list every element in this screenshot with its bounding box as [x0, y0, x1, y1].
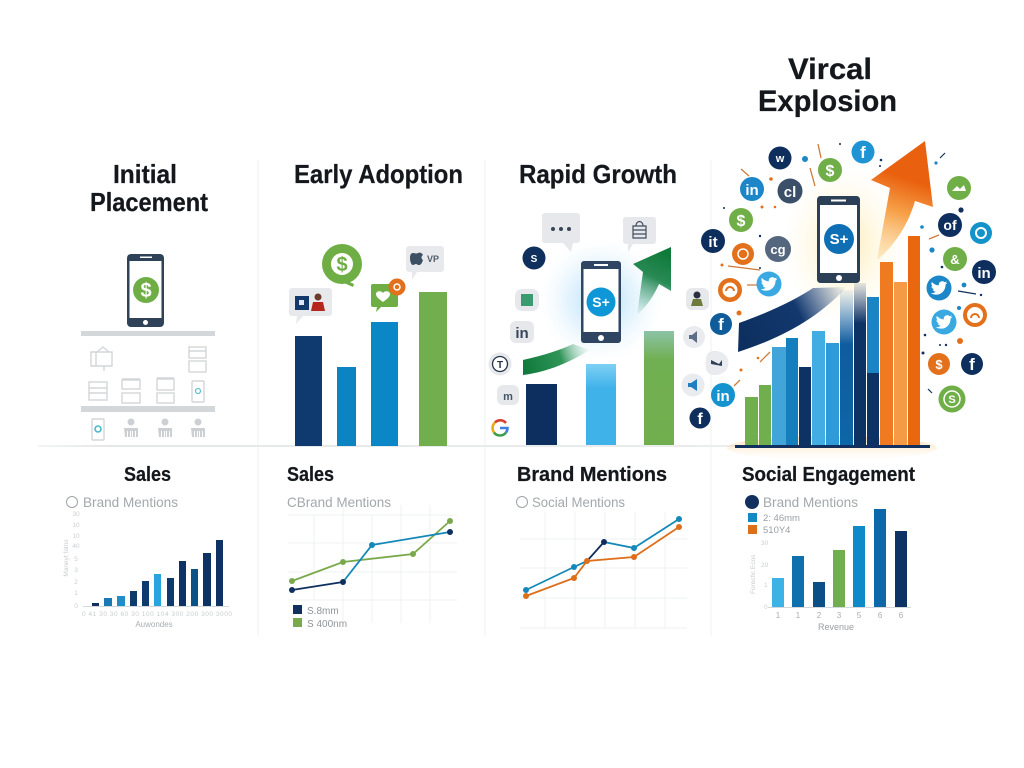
- title: Vircal Explosion: [758, 53, 897, 118]
- grid: [520, 512, 687, 628]
- icon: shopping bag bubble: [623, 217, 656, 252]
- panel: viral explosion: [701, 53, 996, 460]
- legend: Brand Mentions and series: 2: 46mm: [763, 513, 800, 524]
- icon: phone with logo: [817, 196, 860, 283]
- legend: series: S.8mm: [307, 606, 339, 617]
- icons: social badges left of phone: cl: [784, 184, 796, 201]
- chart panel: sales bars: [63, 464, 232, 629]
- icon: phone with dollar: [127, 254, 164, 327]
- legend: series: [293, 605, 347, 630]
- grey product icons: [89, 347, 206, 403]
- x axis labels: 2: [817, 611, 822, 620]
- y axis labels: Maneyt fatns: [63, 539, 70, 577]
- icon: phone with logo: S+: [830, 231, 849, 248]
- column dividers and baseline: [38, 160, 738, 636]
- icons: social badges left of phone: in: [745, 182, 759, 199]
- title: Early Adoption: Early Adoption: [294, 159, 463, 189]
- title: Initial Placement: Placement: [90, 187, 208, 217]
- arrow: green swoosh: [523, 344, 590, 375]
- bar chart: viral bars: [735, 236, 930, 448]
- icons: right social cluster: [682, 288, 724, 428]
- icon: grey bubble with brand: VP: [427, 254, 439, 264]
- icons: social badges top of phone: [818, 140, 874, 182]
- y axis labels: 10: [72, 533, 80, 540]
- legend: Brand Mentions and series: [745, 494, 858, 536]
- x axis labels: 6: [878, 611, 883, 620]
- icons: social badges right of chart: f: [969, 355, 975, 374]
- icon: heart bubble with badge: [371, 278, 406, 312]
- icons: left social cluster: S: [531, 254, 538, 265]
- icons: social badges top of phone: $: [826, 163, 835, 180]
- orange glow under chart: [727, 436, 937, 460]
- arrow: navy swoosh: [738, 287, 847, 352]
- heading: Sales: Sales: [287, 464, 334, 486]
- panel: rapid growth: [488, 159, 724, 445]
- icons: social badges top of phone: f: [860, 143, 866, 162]
- title: Initial Placement: Initial: [113, 159, 177, 189]
- x axis title: Revenue: [818, 622, 854, 632]
- icons: left social cluster: [488, 246, 546, 405]
- title: Initial Placement: [90, 159, 208, 217]
- icon: phone with logo: S+: [592, 294, 610, 310]
- heading: Social Engagement: Social Engagement: [742, 464, 915, 486]
- y axis labels: 2: [74, 579, 78, 586]
- icons: social badges left of phone: f: [718, 315, 724, 334]
- y axis labels: 30: [72, 511, 80, 518]
- y axis labels: 1: [764, 582, 768, 589]
- legend: Brand Mentions and series: Brand Mentions: [763, 494, 858, 510]
- legend: Brand Mentions and series: 510Y4: [763, 525, 790, 536]
- y axis labels: [63, 511, 80, 610]
- heading: Sales: Sales: [124, 464, 171, 486]
- icons: social badges right of chart: in: [977, 265, 991, 282]
- lower shelf: [81, 406, 215, 412]
- icon: grey bubble with avatar: [289, 288, 332, 324]
- icons: social badges right of chart: $: [935, 357, 943, 372]
- icon: phone with logo: [581, 261, 621, 343]
- y axis labels: 20: [761, 562, 769, 569]
- icon: green dollar bubble: $: [336, 254, 348, 276]
- icons: social badges right of chart: [926, 176, 996, 412]
- legend: Brand Mentions: Brand Mentions: [83, 494, 178, 510]
- y axis labels: 1: [74, 590, 78, 597]
- title: Rapid Growth: Rapid Growth: [519, 159, 677, 189]
- panel: initial placement: [81, 159, 215, 440]
- y axis labels: 0: [74, 603, 78, 610]
- yellow glow behind phone: [783, 165, 907, 325]
- icon: phone with dollar: $: [140, 280, 152, 302]
- chart panel: social engagement: [742, 464, 915, 632]
- x axis labels: 3: [837, 611, 842, 620]
- bar chart: growth bars: [526, 331, 674, 445]
- legend: CBrand Mentions: CBrand Mentions: [287, 494, 391, 510]
- chart panel: brand mentions: [516, 464, 687, 628]
- y axis labels: [750, 540, 769, 611]
- blue glow behind phone: [539, 238, 663, 362]
- icons: left social cluster: T: [497, 360, 503, 371]
- x axis labels: 1: [796, 611, 801, 620]
- x axis labels: [776, 611, 904, 620]
- legend: series: S 400nm: [307, 619, 347, 630]
- y axis labels: Forecfic Ecos: [750, 554, 757, 594]
- y axis labels: 3: [74, 567, 78, 574]
- bar chart: sales: [83, 540, 229, 607]
- icons: social badges left of phone: in: [716, 388, 730, 405]
- x axis labels: 5: [857, 611, 862, 620]
- confetti particles: [720, 143, 982, 393]
- icons: left social cluster: m: [503, 391, 513, 403]
- y axis labels: 30: [761, 540, 769, 547]
- line chart: brand mentions: [523, 516, 682, 599]
- x axis title: Auwondes: [135, 620, 173, 629]
- icons: social badges left of phone: w: [775, 153, 785, 165]
- icons: social badges left of phone: [701, 146, 802, 407]
- title: Vircal Explosion: Explosion: [758, 85, 897, 118]
- arrow: green rising arrow: [633, 247, 671, 315]
- bar chart: adoption bars: [295, 292, 447, 446]
- panel: early adoption: [289, 159, 463, 446]
- icon: google G: [493, 420, 508, 435]
- y axis labels: 0: [764, 604, 768, 611]
- top shelf: [81, 331, 215, 336]
- x axis labels: 1: [776, 611, 781, 620]
- y axis labels: 5: [74, 556, 78, 563]
- icons: social badges right of chart: &: [950, 252, 960, 267]
- line chart: sales: [289, 518, 453, 593]
- grey people icons: [92, 418, 205, 440]
- x axis labels: 0 41 30 30 60 30 100 104 300 200 300 3000: [82, 611, 232, 618]
- chart panel: sales lines: [287, 464, 457, 630]
- icon: dots speech bubble: [542, 213, 580, 252]
- arrow: orange rising arrow: [871, 141, 933, 260]
- icons: left social cluster: in: [515, 325, 529, 342]
- icons: social badges right of chart: of: [943, 217, 957, 233]
- grid: [288, 505, 457, 623]
- legend: Social Mentions: Social Mentions: [532, 494, 625, 510]
- icon: grey bubble with brand: [406, 246, 444, 280]
- icons: right social cluster: f: [697, 411, 703, 428]
- x axis labels: 6: [899, 611, 904, 620]
- icon: green dollar bubble: [322, 244, 362, 287]
- y axis labels: 40: [72, 543, 80, 550]
- bar chart: engagement: [768, 509, 911, 608]
- icons: social badges left of phone: cg: [770, 242, 786, 257]
- heading: Brand Mentions: Brand Mentions: [517, 464, 667, 486]
- icons: social badges left of phone: it: [708, 234, 718, 251]
- y axis labels: 10: [72, 522, 80, 529]
- title: Vircal Explosion: Vircal: [788, 53, 872, 86]
- icons: social badges left of phone: $: [737, 213, 746, 230]
- icons: social badges right of chart: S: [948, 394, 956, 406]
